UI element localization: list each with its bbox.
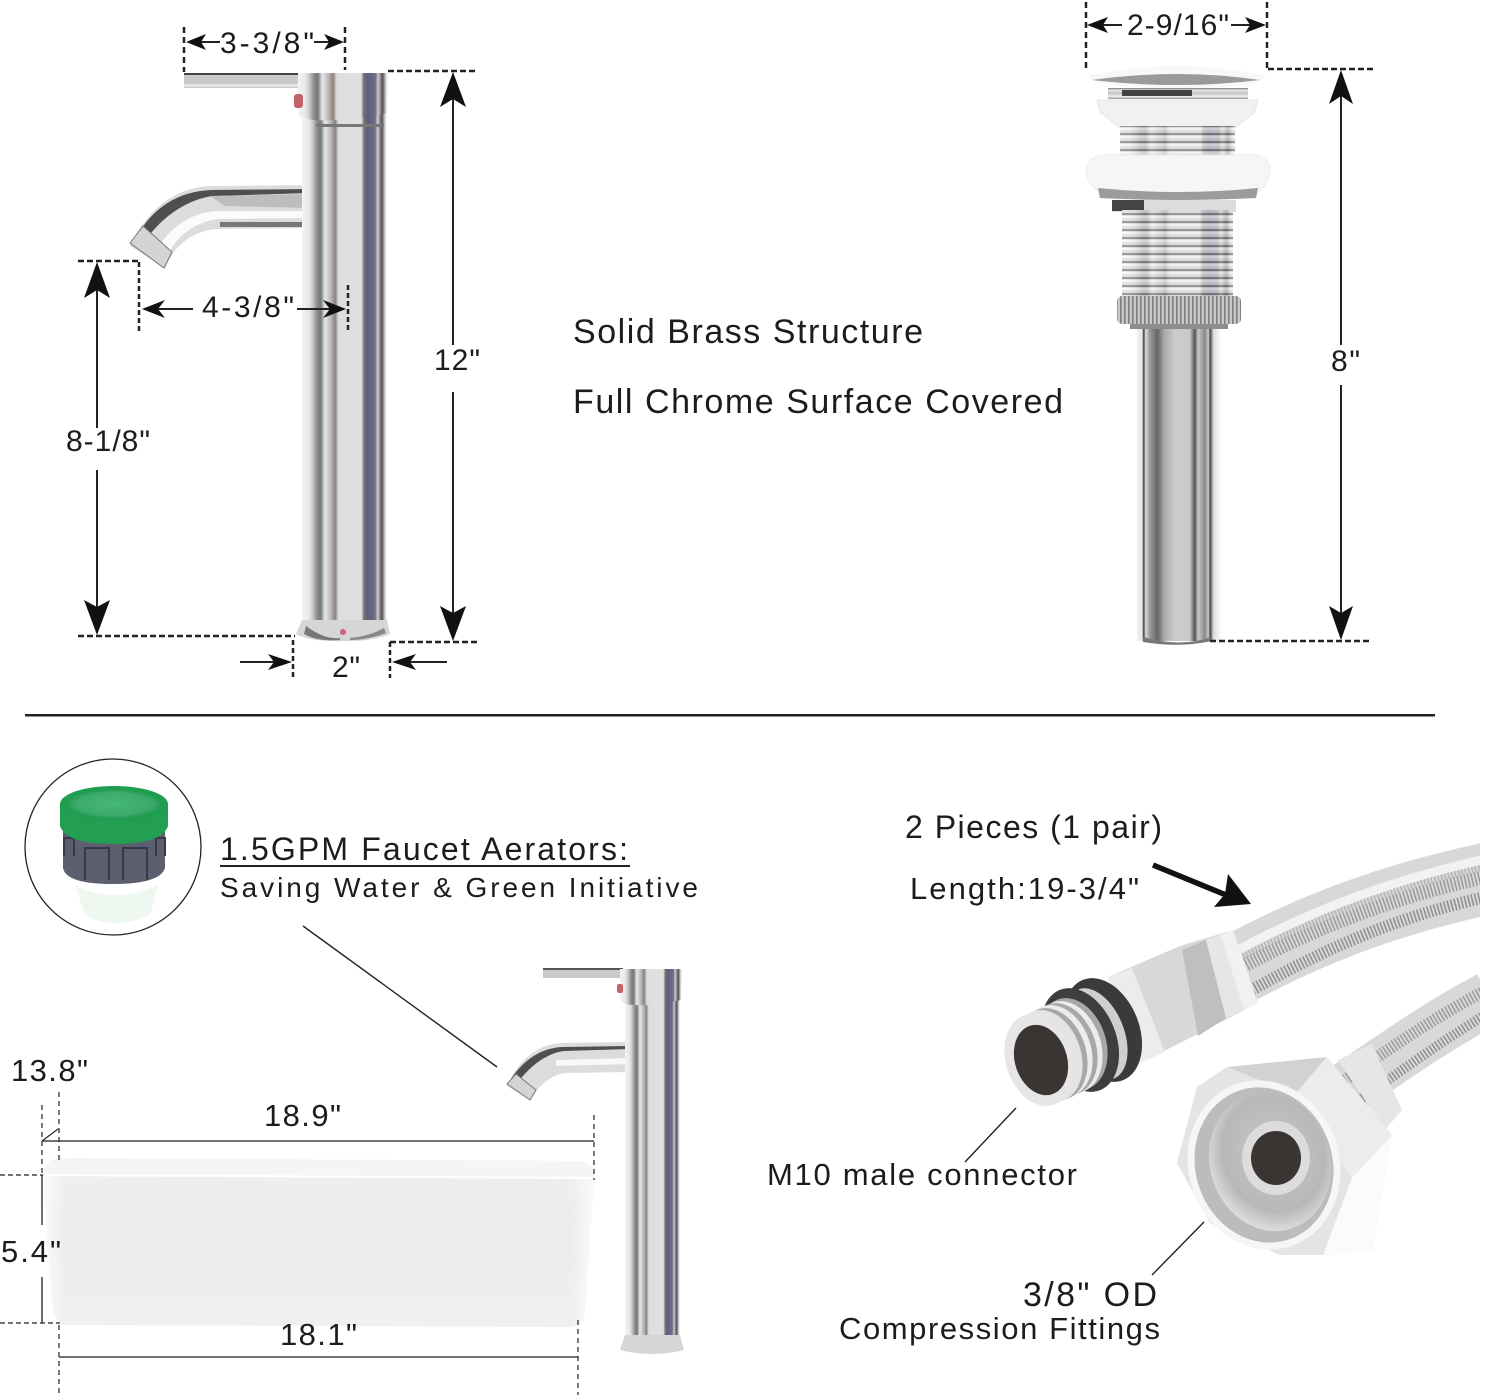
panel: aerator callout [25, 759, 698, 1067]
dimension: 12 inch total height: 12" [434, 344, 480, 377]
text: hose length: Length:19-3/4" [910, 871, 1139, 906]
dimension: 8 inch drain height: 8" [1331, 345, 1360, 378]
leader line: male connector [965, 1108, 1016, 1162]
dimension: 5.4 inch height [0, 1175, 61, 1323]
dimension: 18.9 inch top width: 18.9" [264, 1098, 341, 1133]
dimension: 2-9/16 inch cap width [1086, 2, 1267, 72]
dimension: 2-9/16 inch cap width: 2-9/16" [1127, 9, 1229, 42]
leader line to faucet [303, 926, 497, 1067]
dimension: 2 inch base width [240, 640, 447, 684]
drain photo [1086, 66, 1270, 645]
upper hose with male connector [993, 858, 1486, 1115]
small faucet photo [507, 968, 684, 1354]
dimension: 4-3/8 inch spout reach [139, 262, 348, 332]
panel: braided supply hoses [767, 809, 1486, 1346]
label: compression fittings: Compression Fittings [839, 1311, 1160, 1346]
dimension: 5.4 inch height: 5.4" [1, 1234, 61, 1269]
dimension: 13.8 inch depth [11, 1053, 88, 1395]
dimension: 8-1/8 inch spout height: 8-1/8" [66, 425, 150, 458]
label: M10 male connector: M10 male connector [767, 1157, 1077, 1192]
dimension: 2 inch base width: 2" [332, 651, 360, 684]
lower hose with compression nut [1170, 988, 1486, 1265]
panel: braided supply hoses: 2 Pieces (1 pair) [905, 809, 1162, 845]
label: 3/8 inch OD: 3/8" OD [1023, 1276, 1157, 1314]
icon: green faucet aerator [60, 786, 168, 924]
dimension: 4-3/8 inch spout reach: 4-3/8" [202, 291, 294, 324]
leader line: compression fitting [1152, 1222, 1204, 1275]
dimension: 18.1 inch bottom width: 18.1" [280, 1317, 357, 1352]
dimension: 8-1/8 inch spout height [66, 261, 295, 636]
divider [25, 714, 1435, 716]
panel: pop-up drain with dimensions [1086, 2, 1375, 645]
text: saving water: Saving Water & Green Initiative [220, 872, 698, 903]
faucet photo [130, 73, 390, 641]
dimension: 13.8 inch depth: 13.8" [11, 1053, 88, 1088]
panel: material description text: Solid Brass Structure [573, 313, 923, 351]
panel: material description text [573, 313, 1063, 421]
dimension: 3-3/8 inch handle length [184, 27, 345, 72]
arrow to hose [1153, 865, 1251, 907]
dimension: 12 inch total height [388, 71, 480, 642]
dimension: 3-3/8 inch handle length: 3-3/8" [220, 27, 314, 60]
heading: faucet aerators: 1.5GPM Faucet Aerators: [220, 831, 628, 867]
panel: material description text: Full Chrome Surface Covered [573, 383, 1063, 421]
panel: vessel basin with faucet [0, 968, 684, 1395]
dimension: 8 inch drain height [1210, 69, 1375, 641]
white rectangular basin [43, 1158, 594, 1327]
panel: tall faucet with dimensions [66, 27, 480, 684]
